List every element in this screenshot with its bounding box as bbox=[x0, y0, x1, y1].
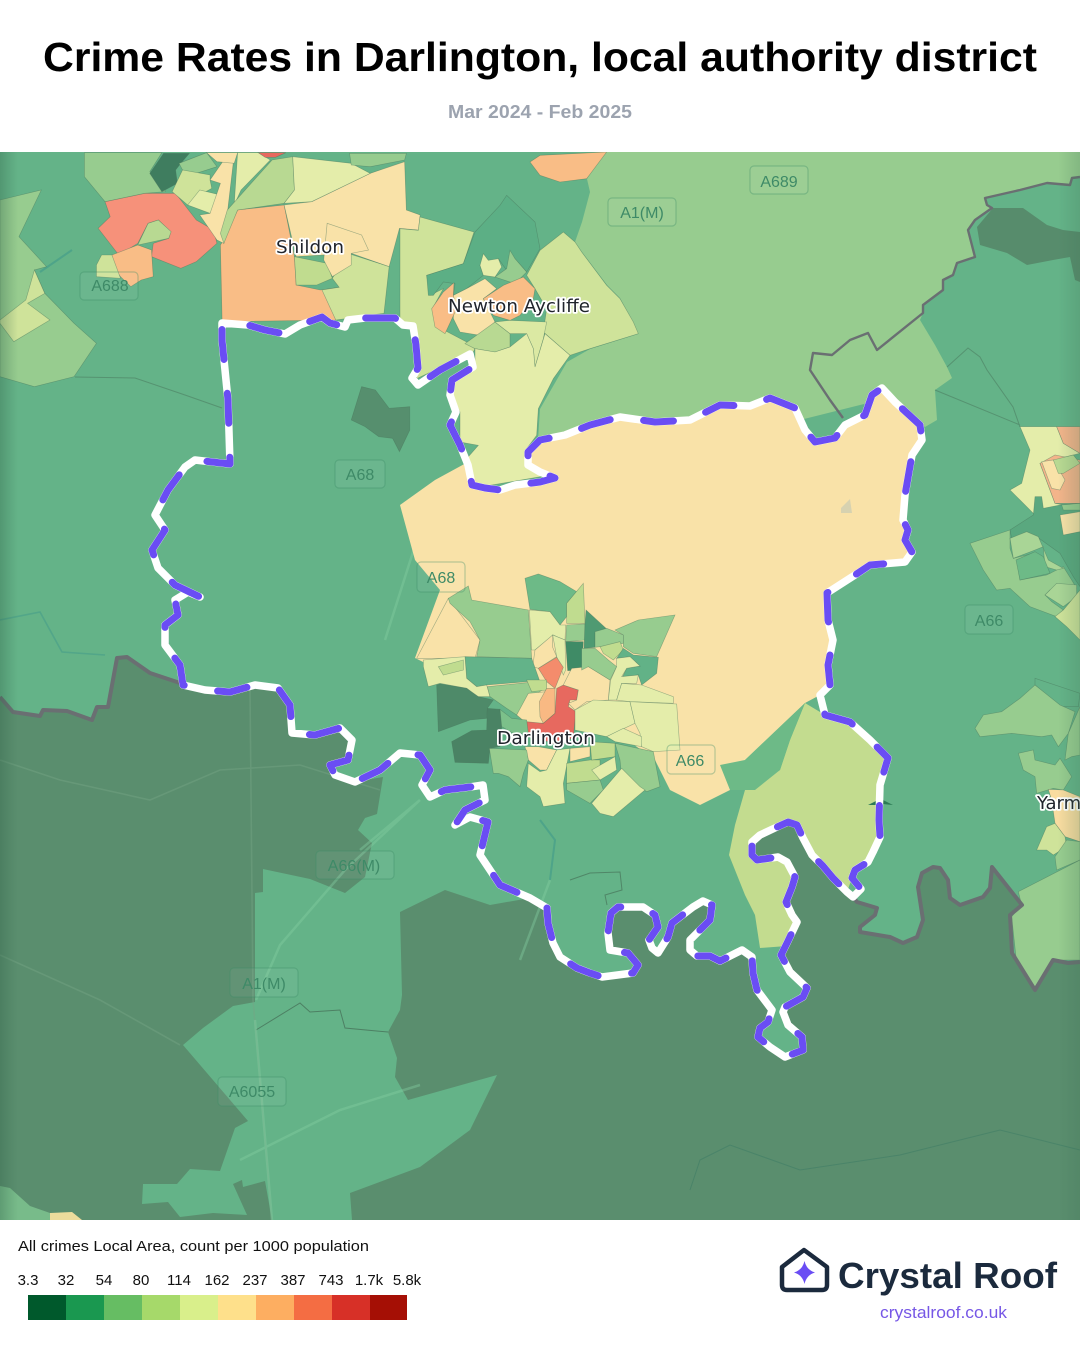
legend scale values bbox=[18, 1272, 422, 1289]
road label: A689 bbox=[750, 166, 808, 194]
region: north-east light green bbox=[538, 152, 1080, 440]
map edge shading bbox=[0, 152, 1080, 1220]
legend title: All crimes Local Area, count per 1000 population bbox=[18, 1238, 369, 1255]
legend scale values: 114 bbox=[167, 1272, 191, 1289]
road label: A66(M) bbox=[316, 851, 394, 879]
road label: A1(M) north bbox=[608, 198, 676, 226]
road label: A66 town: A66 bbox=[676, 753, 704, 770]
thin ward outlines bbox=[75, 348, 1080, 1190]
website link: crystalroof.co.uk bbox=[880, 1304, 1008, 1322]
road label: A688: A688 bbox=[91, 278, 129, 295]
legend scale values: 3.3 bbox=[18, 1272, 38, 1289]
road label: A68 south bbox=[417, 562, 465, 592]
road label: A66 town bbox=[667, 745, 715, 774]
subtitle: date range: Mar 2024 - Feb 2025 bbox=[448, 101, 632, 122]
legend scale values: 387 bbox=[280, 1272, 306, 1289]
road label: A6055 bbox=[218, 1077, 286, 1106]
region: Darlington rural district cream bbox=[400, 388, 922, 805]
legend scale values: 162 bbox=[204, 1272, 230, 1289]
legend scale values: 743 bbox=[318, 1272, 344, 1289]
place label: Newton Aycliffe: Newton Aycliffe bbox=[448, 296, 590, 317]
wards: north of the district, Shildon bbox=[0, 153, 420, 452]
grey patch inside district bbox=[841, 499, 852, 513]
wards: Darlington town bbox=[417, 574, 680, 817]
road label: A66 east: A66 bbox=[975, 613, 1003, 630]
region: south-east yellow-green bbox=[729, 703, 888, 948]
legend scale values: 32 bbox=[58, 1272, 74, 1289]
road label: A1(M) south: A1(M) bbox=[242, 976, 286, 993]
wards: Newton Aycliffe bbox=[400, 152, 638, 489]
legend scale values: 237 bbox=[242, 1272, 268, 1289]
road label: A6055: A6055 bbox=[229, 1084, 275, 1101]
place label: Yarm: Yarm bbox=[1036, 793, 1080, 814]
legend scale values: 1.7k bbox=[355, 1272, 384, 1289]
wards: east cluster near A66 bbox=[970, 427, 1080, 640]
place label: Darlington: Darlington bbox=[497, 728, 595, 749]
legend scale values: 5.8k bbox=[393, 1272, 422, 1289]
title: Crime Rates in Darlington, local authority district bbox=[43, 34, 1037, 80]
icon: house with star bbox=[782, 1250, 827, 1290]
place label: Shildon: Shildon bbox=[276, 237, 344, 258]
region: south-west dark green bbox=[0, 657, 383, 1220]
road label: A66 east bbox=[965, 605, 1013, 634]
legend bbox=[18, 1238, 422, 1320]
icon: airplane bbox=[868, 800, 893, 805]
region: green wedge south-east of town bbox=[720, 703, 805, 790]
logo wordmark: Crystal Roof bbox=[838, 1255, 1058, 1296]
wards: Yarm and far east bbox=[975, 678, 1080, 987]
region: north-east dark patch bbox=[977, 208, 1080, 282]
district boundary: white base with purple dashes bbox=[152, 317, 922, 1057]
legend scale values: 54 bbox=[96, 1272, 112, 1289]
region: bottom-left cream sliver bbox=[50, 1212, 82, 1220]
road label: A689: A689 bbox=[760, 174, 798, 191]
road label: A1(M) north: A1(M) bbox=[620, 205, 664, 222]
road label: A1(M) south bbox=[230, 968, 298, 997]
region: bottom-left lighter corner bbox=[0, 1186, 50, 1220]
choropleth map bbox=[0, 152, 1080, 1220]
legend colour swatches bbox=[28, 1295, 407, 1320]
region: south dark green bbox=[350, 822, 1080, 1220]
road label: A68 south: A68 bbox=[427, 570, 455, 587]
road label: A688 bbox=[80, 272, 138, 300]
legend scale values: 80 bbox=[133, 1272, 149, 1289]
rivers and roads bbox=[0, 249, 556, 1220]
map base: green areas bbox=[0, 152, 1080, 1220]
logo: Crystal Roof bbox=[782, 1250, 1058, 1322]
road label: A66(M): A66(M) bbox=[328, 858, 380, 875]
road label: A68 north bbox=[335, 460, 385, 488]
county boundary line bbox=[0, 177, 1080, 990]
road label: A68 north: A68 bbox=[346, 467, 374, 484]
